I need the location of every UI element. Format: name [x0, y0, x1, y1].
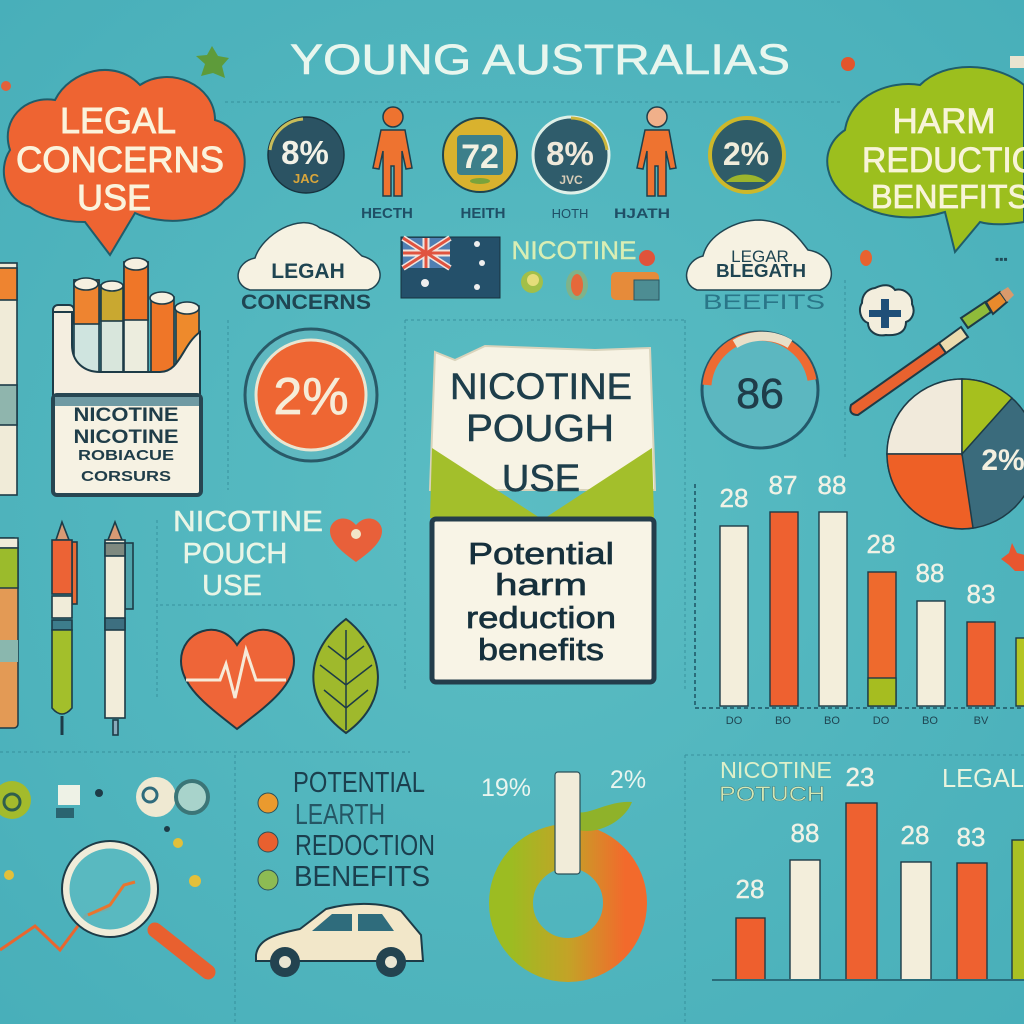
icon: pen brush — [850, 287, 1014, 415]
heading: nicotine pouch use: POUCH — [183, 538, 287, 570]
icon: pouch strip left — [0, 538, 18, 728]
panel: central nicotine pouch pack: USE — [502, 458, 580, 500]
icon: small red flower — [1001, 543, 1024, 571]
icon: decorative stars — [1, 46, 1024, 91]
stat: 72 circle: 72 — [461, 138, 499, 176]
icon: car — [256, 904, 423, 977]
stat labels: HJATH — [614, 205, 670, 221]
pack lower label: reduction — [466, 600, 616, 635]
icon: heart with pulse — [181, 630, 294, 729]
stat: 8% dark circle — [533, 117, 609, 193]
heading: legal: LEGAL — [942, 763, 1024, 793]
pack label: NICOTINE — [74, 427, 178, 448]
pack green flap — [430, 448, 654, 518]
callout: legal concerns use: USE — [77, 177, 151, 218]
icons: small pictograms — [521, 250, 659, 300]
chart: right bar chart: BV — [974, 715, 989, 727]
pack label — [53, 395, 201, 495]
icon: orange person — [373, 107, 412, 196]
stat gauge: 86 — [702, 332, 818, 448]
chart: bottom right bar chart: 28 — [736, 874, 764, 904]
chart: right bar chart: 87 — [769, 470, 797, 500]
callout: harm reduction benefits — [827, 67, 1024, 252]
icon: pen 1 — [52, 522, 77, 735]
stat: 8% dark circle: JVC — [559, 173, 583, 187]
icon: medical plus badge — [860, 285, 914, 335]
pack lower label: benefits — [478, 632, 604, 667]
stat gauge: 2%: 2% — [273, 368, 349, 426]
pack body — [53, 312, 200, 396]
heading: nicotine pouch use: USE — [202, 570, 262, 602]
heading: nicotine pouch small: NICOTINE — [720, 757, 832, 783]
stat: 2% circle — [710, 118, 784, 192]
list: potential health reduction benefits — [258, 767, 435, 893]
chart: donut with cigarette: 19% — [481, 774, 531, 802]
icon: left edge cigarette — [0, 263, 17, 495]
chart: right bar chart: 88 — [916, 558, 944, 588]
heading: nicotine pouch small: POTUCH — [719, 783, 825, 806]
chart: right bar chart: 28 — [867, 529, 895, 559]
chart: right bar chart: DO — [726, 715, 743, 727]
pack top — [430, 346, 655, 490]
panel: legal concerns cloud: CONCERNS — [241, 291, 371, 314]
pack lower label — [432, 519, 654, 682]
panel: legal health benefits cloud: BLEGATH — [716, 261, 806, 281]
panel: legal health benefits cloud: BEEFITS — [703, 291, 825, 314]
list: potential health reduction benefits: POTENTIAL — [293, 767, 425, 799]
chart: bottom right bar chart: 28 — [901, 820, 929, 850]
heading: nicotine: NICOTINE — [512, 237, 636, 265]
small dark notes top right — [860, 250, 1008, 266]
chart: donut with cigarette: 2% — [610, 766, 646, 794]
icon: orange person 2 — [637, 107, 676, 196]
top stat row — [268, 107, 784, 222]
small dark notes top right: ▪▪▪ — [995, 252, 1008, 266]
stat gauge: 2% — [245, 329, 377, 461]
icon: left cigarette in pack — [53, 305, 74, 325]
chart: bottom right bar chart: 23 — [846, 762, 874, 792]
stat: 8% dark circle: 8% — [546, 135, 594, 172]
panel: central nicotine pouch pack: POUGH — [466, 408, 614, 450]
icon: small heart — [330, 518, 382, 562]
stat labels: HOTH — [552, 206, 588, 221]
panel: legal concerns cloud: LEGAH — [271, 260, 345, 283]
stat gauge: 86: 86 — [736, 370, 784, 418]
chart: right bar chart: 83 — [967, 579, 995, 609]
cigarettes — [74, 258, 199, 372]
stat: 8% circle: JAC — [293, 171, 320, 186]
heading: nicotine pouch small — [719, 757, 832, 806]
chart: donut with cigarette — [481, 766, 646, 960]
stat labels: HEITH — [460, 205, 506, 222]
chart: right bar chart: 28 — [720, 483, 748, 513]
stat labels — [361, 205, 670, 222]
chart: right bar chart — [695, 470, 1024, 727]
pack label: ROBIACUE — [78, 447, 174, 464]
small icons cluster — [0, 777, 208, 887]
left pens — [0, 522, 133, 735]
stat: 2% circle: 2% — [723, 136, 769, 172]
chart: right bar chart: BO — [824, 715, 840, 727]
panel: legal health benefits cloud: LEGAR — [731, 247, 789, 266]
list: potential health reduction benefits: BENEFITS — [294, 861, 430, 893]
icon: leaf — [313, 619, 378, 733]
chart: right bar chart: BO — [922, 715, 938, 727]
pack lower label: Potential — [468, 536, 614, 571]
list: potential health reduction benefits: LEARTH — [295, 799, 385, 831]
icon: australian flag — [401, 237, 500, 298]
panel: cigarette pack — [53, 258, 201, 495]
stat: 8% circle — [268, 117, 344, 193]
panel: central nicotine pouch pack — [430, 346, 655, 682]
callout: legal concerns use: CONCERNS — [16, 139, 224, 180]
stat: 8% circle: 8% — [281, 134, 329, 171]
list: potential health reduction benefits: REDOCTION — [295, 830, 435, 862]
panel: legal concerns cloud — [238, 223, 380, 314]
pack label: NICOTINE — [74, 405, 178, 426]
icon: magnifier with line chart — [0, 841, 208, 972]
icon: pen 2 — [105, 522, 133, 735]
heading: nicotine — [512, 237, 659, 300]
heading: nicotine pouch use — [173, 506, 323, 602]
chart: right bar chart: BO — [775, 715, 791, 727]
pack lower label: harm — [495, 567, 587, 602]
callout: harm reduction benefits: HARM — [892, 102, 996, 141]
stat: 72 circle — [443, 118, 517, 192]
heading: nicotine pouch use: NICOTINE — [173, 506, 323, 538]
chart: pie — [887, 379, 1024, 529]
panel: central nicotine pouch pack: NICOTINE — [450, 366, 632, 407]
chart: bottom right bar chart — [712, 762, 1024, 980]
chart: right bar chart: 88 — [818, 470, 846, 500]
callout: legal concerns use: LEGAL — [60, 100, 176, 141]
callout: legal concerns use — [4, 70, 245, 255]
chart: bottom right bar chart: 88 — [791, 818, 819, 848]
chart: right bar chart: DO — [873, 715, 890, 727]
chart: pie: 2% — [981, 444, 1024, 477]
chart: bottom right bar chart: 83 — [957, 822, 985, 852]
panel: legal health benefits cloud — [687, 220, 831, 314]
stat labels: HECTH — [361, 205, 413, 222]
pack label: CORSURS — [81, 468, 171, 485]
title: YOUNG AUSTRALIAS — [290, 36, 790, 84]
